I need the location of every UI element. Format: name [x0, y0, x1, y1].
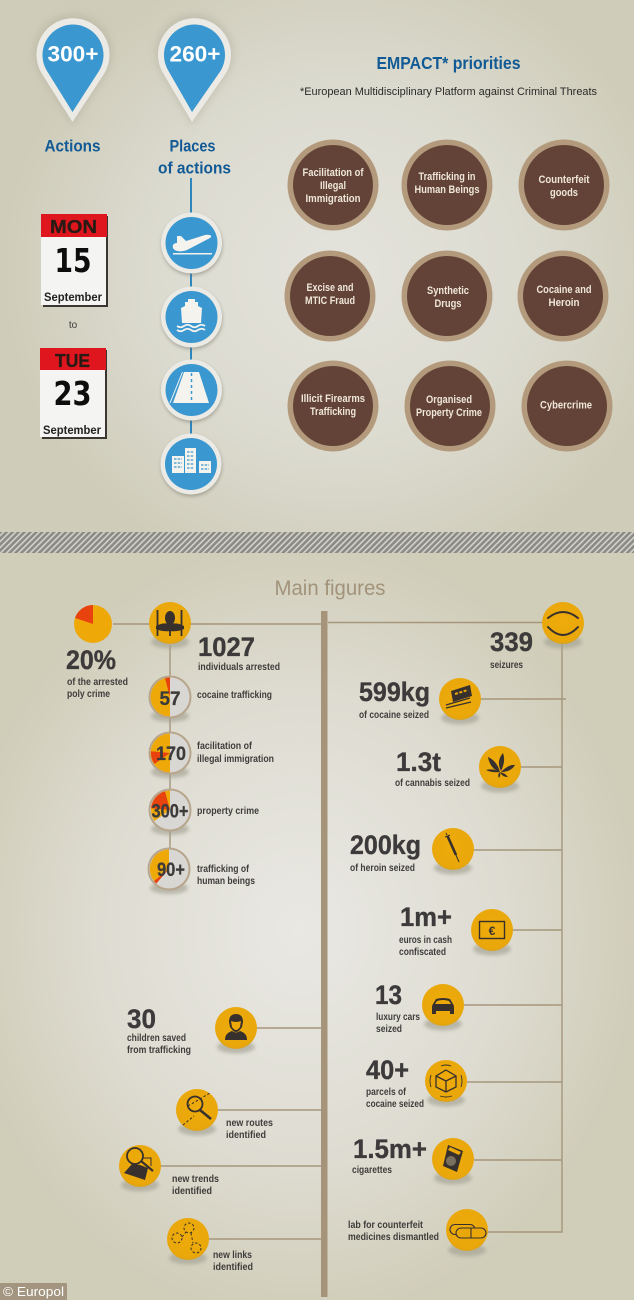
priority: Cocaine and Heroin: Cocaine and — [536, 284, 592, 296]
priority: Counterfeit goods — [518, 140, 610, 230]
priority: Synthetic Drugs — [402, 250, 492, 342]
stat: 13 luxury cars seized: seized — [376, 1023, 402, 1035]
icon: euro banknote: € — [489, 924, 496, 938]
background: bottom section — [0, 553, 634, 1300]
label: new routes identified: new routes — [226, 1117, 273, 1129]
priority: Facilitation of Illegal Immigration: Facilitation of — [302, 167, 364, 179]
pin: 300+ actions: 300+ — [48, 42, 98, 66]
text: lab for counterfeit medicines dismantled: lab for counterfeit — [348, 1219, 423, 1231]
label: facilitation of illegal immigration: illegal immigration — [197, 753, 274, 765]
label: facilitation of illegal immigration: facilitation of — [197, 740, 252, 752]
pie: 20% poly crime — [74, 605, 112, 643]
icon: cigarette pack — [432, 1138, 474, 1184]
stat: 20% of the arrested poly crime: 20% — [66, 645, 116, 675]
priority: Cybercrime — [522, 360, 612, 452]
pin: 260+ places — [156, 14, 234, 126]
icon: luxury car — [422, 984, 464, 1030]
icon: razor blade and cocaine lines — [439, 678, 481, 724]
priority: Trafficking in Human Beings: Trafficking in — [418, 171, 476, 183]
stat: 200kg of heroin seized — [350, 830, 421, 874]
pin: 260+ places: 260+ — [170, 42, 220, 66]
priority: Counterfeit goods: goods — [550, 187, 578, 199]
calendar: Mon 15 September: MON — [50, 217, 97, 237]
text: to: to — [69, 320, 78, 331]
calendar: Mon 15 September: September — [44, 292, 103, 304]
priority: Synthetic Drugs: Drugs — [434, 298, 462, 310]
stat: 13 luxury cars seized: luxury cars — [376, 1011, 420, 1023]
label: new routes identified — [226, 1117, 273, 1141]
priority: Excise and MTIC Fraud: MTIC Fraud — [305, 295, 355, 307]
background: top section — [0, 0, 634, 532]
credit: Europol — [0, 1283, 67, 1300]
stat: 1027 individuals arrested: 1027 — [198, 632, 255, 662]
icon: magnifier over route — [176, 1089, 218, 1136]
priority: Cocaine and Heroin: Heroin — [548, 297, 580, 309]
priority: Organised Property Crime — [404, 360, 496, 452]
label: property crime: property crime — [197, 805, 259, 817]
stat: 1m+ euros in cash confiscated: confiscated — [399, 946, 446, 958]
label: new links identified: identified — [213, 1261, 253, 1273]
label: trafficking of human beings: human beings — [197, 875, 255, 887]
text: EMPACT definition: *European Multidisciplinary Platform against Criminal Threats — [300, 86, 597, 98]
pie: 90+ trafficking of human beings: 90+ — [157, 860, 185, 881]
icon: ship — [161, 286, 222, 350]
stat: 1.3t of cannabis seized — [395, 747, 470, 789]
icon: euro banknote — [471, 909, 513, 956]
stat: 339 seizures: 339 — [490, 627, 533, 657]
calendar: Mon 15 September — [41, 214, 108, 307]
pie: 57 cocaine trafficking: 57 — [160, 689, 180, 710]
central timeline bar — [321, 611, 328, 1297]
stat: 20% of the arrested poly crime: of the arrested — [67, 676, 128, 688]
label: new trends identified: identified — [172, 1185, 212, 1197]
label: Places of actions: Places — [170, 138, 216, 156]
icon: child — [215, 1007, 257, 1054]
priority: Facilitation of Illegal Immigration: Immigration — [306, 193, 361, 205]
stat: 1.5m+ cigarettes — [352, 1134, 427, 1176]
label: new links identified: new links — [213, 1249, 252, 1261]
stat: 1m+ euros in cash confiscated: 1m+ — [400, 902, 452, 932]
label: new trends identified: new trends — [172, 1173, 219, 1185]
heading: Main figures: Main figures — [274, 577, 386, 600]
stat: 1027 individuals arrested — [198, 632, 280, 673]
priority: Cocaine and Heroin — [518, 250, 608, 342]
stat: 599kg of cocaine seized: 599kg — [359, 677, 430, 707]
priority: Trafficking in Human Beings — [402, 140, 492, 230]
stat: 599kg of cocaine seized — [359, 677, 430, 721]
stat: 30 children saved from trafficking: children saved — [127, 1032, 186, 1044]
stat: 20% of the arrested poly crime: poly crime — [67, 688, 110, 700]
connector line for transport icons — [190, 178, 192, 445]
priority: Excise and MTIC Fraud — [284, 250, 376, 342]
icon: airplane — [161, 212, 222, 276]
stat: 200kg of heroin seized: of heroin seized — [350, 862, 415, 874]
pin: 300+ actions — [34, 14, 112, 126]
stat: 1.5m+ cigarettes: 1.5m+ — [353, 1134, 427, 1164]
label: new links identified — [213, 1249, 253, 1273]
calendar: Tue 23 September: 23 — [54, 374, 92, 413]
calendar: Tue 23 September — [40, 348, 107, 439]
label: new trends identified — [172, 1173, 219, 1197]
stat: 30 children saved from trafficking: from trafficking — [127, 1044, 191, 1056]
priority: Illicit Firearms Trafficking — [288, 360, 378, 452]
label: new routes identified: identified — [226, 1129, 266, 1141]
calendar: Mon 15 September: 15 — [54, 241, 92, 280]
stat: 40+ parcels of cocaine seized: parcels of — [366, 1086, 406, 1098]
icon: arrested person behind bars — [149, 602, 191, 648]
striped divider band — [0, 532, 634, 553]
credit: Europol: © Europol — [3, 1285, 64, 1299]
stat: 13 luxury cars seized — [375, 980, 420, 1035]
pie: 170 facilitation of illegal immigration — [150, 732, 190, 778]
priority: Illicit Firearms Trafficking: Trafficking — [310, 406, 356, 418]
icon: parcel — [425, 1060, 467, 1106]
priority: Excise and MTIC Fraud: Excise and — [306, 282, 354, 294]
pie: 57 cocaine trafficking — [150, 676, 190, 722]
label: facilitation of illegal immigration — [197, 740, 274, 765]
stat: 40+ parcels of cocaine seized — [366, 1055, 424, 1110]
stat: 339 seizures — [490, 627, 533, 671]
priority: Synthetic Drugs: Synthetic — [427, 285, 469, 297]
stat: 599kg of cocaine seized: of cocaine seized — [359, 709, 429, 721]
stat: 1m+ euros in cash confiscated: euros in cash — [399, 934, 452, 946]
icon: road — [161, 360, 222, 422]
stat: 1m+ euros in cash confiscated — [399, 902, 452, 958]
priority: Organised Property Crime: Property Crime — [416, 407, 482, 419]
icon: magnifier over chart — [119, 1145, 161, 1192]
priority: Trafficking in Human Beings: Human Beings — [414, 184, 480, 196]
stat: 339 seizures: seizures — [490, 659, 523, 671]
icon: cannabis leaf — [479, 746, 521, 792]
priority: Cybercrime: Cybercrime — [540, 400, 592, 412]
text: lab for counterfeit medicines dismantled — [348, 1219, 439, 1243]
stat: 30 children saved from trafficking: 30 — [127, 1004, 156, 1034]
text: lab for counterfeit medicines dismantled: medicines dismantled — [348, 1231, 439, 1243]
stat: 1.3t of cannabis seized: 1.3t — [396, 747, 441, 777]
icon: dashed links — [167, 1218, 209, 1264]
pie: 170 facilitation of illegal immigration: 170 — [156, 744, 186, 765]
stat: 200kg of heroin seized: 200kg — [350, 830, 421, 860]
icon: city buildings — [160, 434, 222, 496]
stat: 30 children saved from trafficking — [127, 1004, 191, 1056]
stat: 13 luxury cars seized: 13 — [375, 980, 402, 1010]
priority: Organised Property Crime: Organised — [426, 394, 472, 406]
label: trafficking of human beings — [197, 863, 255, 887]
priority: Facilitation of Illegal Immigration — [288, 140, 378, 230]
label: Actions: Actions — [44, 138, 100, 156]
label: Places of actions — [158, 138, 231, 178]
calendar: Tue 23 September: September — [43, 425, 102, 437]
stat: 1.5m+ cigarettes: cigarettes — [352, 1164, 392, 1176]
pie: 300+ property crime: 300+ — [152, 802, 188, 822]
icon: pills — [446, 1209, 488, 1256]
calendar: Tue 23 September: TUE — [55, 351, 90, 371]
stat: 1027 individuals arrested: individuals arrested — [198, 661, 280, 673]
icon: syringe — [432, 828, 474, 874]
priority: Facilitation of Illegal Immigration: Illegal — [320, 180, 346, 192]
pie: 90+ trafficking of human beings — [148, 848, 190, 894]
stat: 40+ parcels of cocaine seized: cocaine seized — [366, 1098, 424, 1110]
stat: 1.3t of cannabis seized: of cannabis seized — [395, 777, 470, 789]
label: Places of actions: of actions — [158, 160, 231, 178]
heading: EMPACT priorities: EMPACT* priorities — [376, 53, 521, 73]
pie: 300+ property crime — [150, 790, 190, 835]
stat: 20% of the arrested poly crime — [66, 645, 128, 700]
label: trafficking of human beings: trafficking of — [197, 863, 249, 875]
priority: Illicit Firearms Trafficking: Illicit Firearms — [301, 393, 365, 405]
priority: Counterfeit goods: Counterfeit — [538, 174, 590, 186]
label: cocaine trafficking: cocaine trafficking — [197, 689, 272, 701]
connector lines: left and right networks — [113, 622, 566, 1239]
stat: 40+ parcels of cocaine seized: 40+ — [366, 1055, 409, 1085]
icon: handcuffs — [542, 602, 584, 648]
